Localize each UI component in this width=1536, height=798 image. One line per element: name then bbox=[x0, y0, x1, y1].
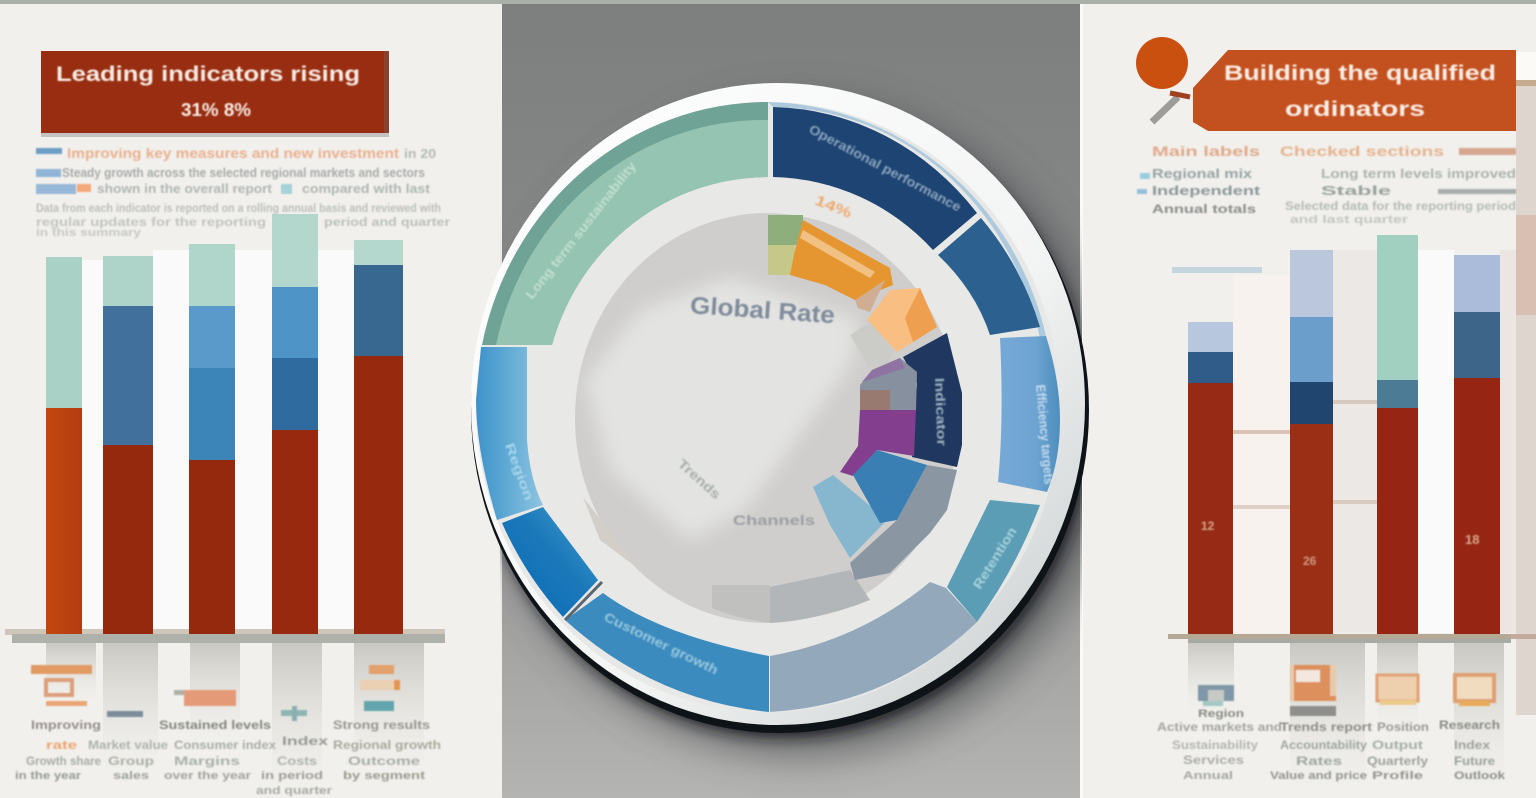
right label column 1: Region bbox=[1198, 708, 1244, 720]
inner sector: tan connector bbox=[855, 280, 885, 312]
right label column 1 bbox=[1157, 685, 1282, 782]
right label column 3: Profile bbox=[1372, 770, 1423, 782]
segment: light blue bbox=[998, 336, 1060, 492]
right stacked bar chart bbox=[1188, 235, 1500, 634]
inner sector: blue bbox=[853, 450, 927, 523]
left column labels bbox=[15, 665, 441, 797]
inner sector: orange bbox=[790, 220, 893, 300]
ring segment labels bbox=[502, 121, 1057, 678]
bar 5 bbox=[354, 240, 403, 634]
label column 4: in period bbox=[261, 770, 323, 782]
segment: navy bbox=[773, 107, 977, 250]
right label column 1: Active markets and bbox=[1157, 720, 1282, 734]
white bands between left bars bbox=[82, 250, 354, 630]
right label column 1: Annual bbox=[1183, 770, 1233, 782]
label column 5: Regional growth bbox=[333, 738, 441, 752]
label column 5: by segment bbox=[343, 770, 425, 782]
segment: dark blue bbox=[502, 507, 598, 617]
label column 1: in the year bbox=[15, 770, 82, 782]
bar 3 bbox=[189, 244, 235, 634]
inner disc bbox=[575, 213, 959, 623]
white bands between right bars bbox=[1233, 250, 1516, 633]
right label column 3: Output bbox=[1372, 738, 1423, 752]
right intro text: and last quarter bbox=[1290, 214, 1409, 226]
right label column 4: Outlook bbox=[1454, 770, 1506, 782]
label column 4: and quarter bbox=[256, 785, 333, 797]
bar 4: 18 bbox=[1465, 532, 1479, 547]
segment: grey blue bbox=[770, 582, 977, 712]
bar 2: 26 bbox=[1303, 554, 1317, 568]
label column 2: Market value bbox=[88, 738, 168, 752]
label column 3 bbox=[159, 690, 276, 782]
ring segment labels: Long term sustainability bbox=[523, 158, 640, 302]
bar 3 bbox=[1377, 235, 1418, 634]
icon: document box bbox=[1290, 665, 1336, 701]
inner sector: slate bbox=[860, 358, 917, 410]
right title banner: Building the qualified bbox=[1224, 62, 1496, 85]
ring segment labels: Region bbox=[502, 441, 537, 502]
panel: left bar chart section bbox=[5, 51, 450, 797]
right label column 1: Sustainability bbox=[1172, 738, 1258, 752]
icon: chart box bbox=[1377, 675, 1418, 705]
left title banner bbox=[41, 51, 389, 137]
label column 1: Improving bbox=[31, 718, 101, 732]
bar 2 bbox=[103, 256, 153, 634]
label column 3: Sustained levels bbox=[159, 718, 271, 732]
ring pointer line bbox=[565, 582, 602, 620]
outer white rim bbox=[471, 83, 1085, 725]
label column 5: Strong results bbox=[333, 718, 430, 732]
segment: mid blue bbox=[476, 347, 543, 520]
right label column 3: Position bbox=[1377, 720, 1429, 734]
inner sector: sky bbox=[813, 475, 887, 558]
right label column 4 bbox=[1439, 675, 1506, 782]
inner label: small orange: 14% bbox=[813, 192, 854, 222]
right title banner bbox=[1136, 37, 1516, 131]
inner sector: grey wedge bbox=[850, 322, 893, 368]
right label column 4: Future bbox=[1454, 754, 1495, 768]
bar 1 bbox=[1188, 322, 1233, 634]
inner white band bbox=[476, 102, 1060, 712]
left intro text: period and quarter bbox=[324, 215, 450, 229]
right intro text: Checked sections bbox=[1280, 143, 1444, 159]
inner sector: purple bbox=[840, 410, 916, 476]
inner sector: navy text: Indicator bbox=[932, 378, 949, 446]
inner sector: green bbox=[768, 215, 803, 275]
label column 2: Group bbox=[108, 754, 154, 768]
bar 1 bbox=[46, 257, 82, 634]
segment: blue bbox=[938, 218, 1040, 335]
panel: right bar chart section bbox=[1136, 37, 1536, 793]
right intro text bbox=[1137, 143, 1516, 226]
right column labels bbox=[1157, 665, 1506, 782]
right label column 3: Quarterly bbox=[1367, 754, 1428, 768]
label column 5: Outcome bbox=[348, 754, 420, 768]
right intro text: Selected data for the reporting period bbox=[1285, 199, 1516, 213]
right label column 2: Accountability bbox=[1280, 738, 1367, 752]
inner sector: grey bbox=[850, 465, 957, 580]
shadows under left bars bbox=[46, 643, 424, 793]
centre labels: Global Rate bbox=[689, 292, 836, 329]
bar 2 bbox=[1290, 250, 1333, 634]
right baseline bbox=[1168, 634, 1536, 643]
label column 3: Margins bbox=[174, 754, 240, 768]
centre labels bbox=[675, 292, 836, 528]
bar 1: 12 bbox=[1201, 519, 1215, 533]
segment: teal bbox=[482, 102, 768, 345]
right label column 2 bbox=[1270, 665, 1372, 782]
right label column 4: Index bbox=[1454, 738, 1490, 752]
left intro text bbox=[36, 145, 450, 239]
bar 4 bbox=[272, 214, 318, 634]
left intro text: in this summary bbox=[36, 227, 142, 239]
right intro text: Independent bbox=[1152, 183, 1261, 198]
label column 1: rate bbox=[46, 738, 77, 752]
inner sector: light orange bbox=[867, 288, 937, 352]
right label column 3 bbox=[1367, 675, 1429, 782]
centre labels: Channels bbox=[733, 512, 815, 528]
left intro text: Steady growth across the selected regional markets and sectors bbox=[62, 165, 425, 180]
right intro text: Main labels bbox=[1152, 143, 1260, 159]
panel: central circular chart bbox=[471, 83, 1112, 754]
dark rim edge bbox=[471, 87, 1089, 733]
left intro text: shown in the overall report bbox=[97, 181, 273, 196]
right title banner: ordinators bbox=[1285, 98, 1425, 121]
label column 4: Index bbox=[282, 734, 328, 748]
left intro text: compared with last bbox=[302, 181, 431, 196]
ring segment labels: Operational performance bbox=[807, 121, 964, 214]
ring segment labels: Efficiency targets bbox=[1033, 384, 1057, 485]
ring segment labels: Retention bbox=[970, 524, 1020, 592]
right label column 4: Research bbox=[1439, 718, 1500, 732]
right label column 1: Services bbox=[1183, 753, 1244, 767]
label column 1: Growth share bbox=[26, 754, 101, 768]
label column 5 bbox=[333, 665, 441, 782]
label column 1 bbox=[15, 665, 101, 782]
bar 4 bbox=[1454, 255, 1500, 634]
right label column 2: Rates bbox=[1296, 754, 1342, 768]
label column 2: sales bbox=[113, 770, 149, 782]
left intro text: in 20 bbox=[404, 146, 436, 161]
left intro text: regular updates for the reporting bbox=[36, 215, 266, 229]
icon: gauge box bbox=[1454, 675, 1495, 706]
inner sector: navy bbox=[903, 333, 962, 467]
label column 3: over the year bbox=[164, 770, 252, 782]
ring drop shadow bbox=[479, 102, 1112, 754]
outer ring segments bbox=[476, 102, 1060, 712]
ring segment labels: Customer growth bbox=[602, 609, 721, 678]
right label column 2: Trends report bbox=[1280, 720, 1372, 734]
left title banner: Leading indicators rising bbox=[56, 63, 360, 86]
left title banner: 31% 8% bbox=[181, 100, 251, 120]
shadows under right bars bbox=[1188, 643, 1504, 793]
right intro text: Stable bbox=[1321, 183, 1391, 198]
right intro text: Long term levels improved bbox=[1321, 166, 1516, 181]
label column 4: Costs bbox=[277, 754, 317, 768]
light blue rim stripe bbox=[768, 102, 1046, 338]
label column 2 bbox=[88, 711, 168, 782]
centre labels: Trends bbox=[675, 456, 724, 502]
left baseline bbox=[5, 629, 445, 643]
left stacked bar chart bbox=[46, 214, 403, 634]
label column 4 bbox=[256, 706, 333, 797]
segment: bottom blue bbox=[565, 593, 769, 712]
label column 3: Consumer index bbox=[174, 738, 276, 752]
right label column 2: Value and price bbox=[1270, 770, 1367, 782]
left intro text: Improving key measures and new investment bbox=[67, 145, 399, 161]
chart legend rule bbox=[1172, 267, 1262, 273]
right intro text: Regional mix bbox=[1152, 166, 1253, 181]
left intro text: Data from each indicator is reported on a rolling annual basis and reviewed with bbox=[36, 201, 441, 215]
right intro text: Annual totals bbox=[1152, 202, 1256, 216]
segment: teal blue bbox=[947, 500, 1040, 622]
